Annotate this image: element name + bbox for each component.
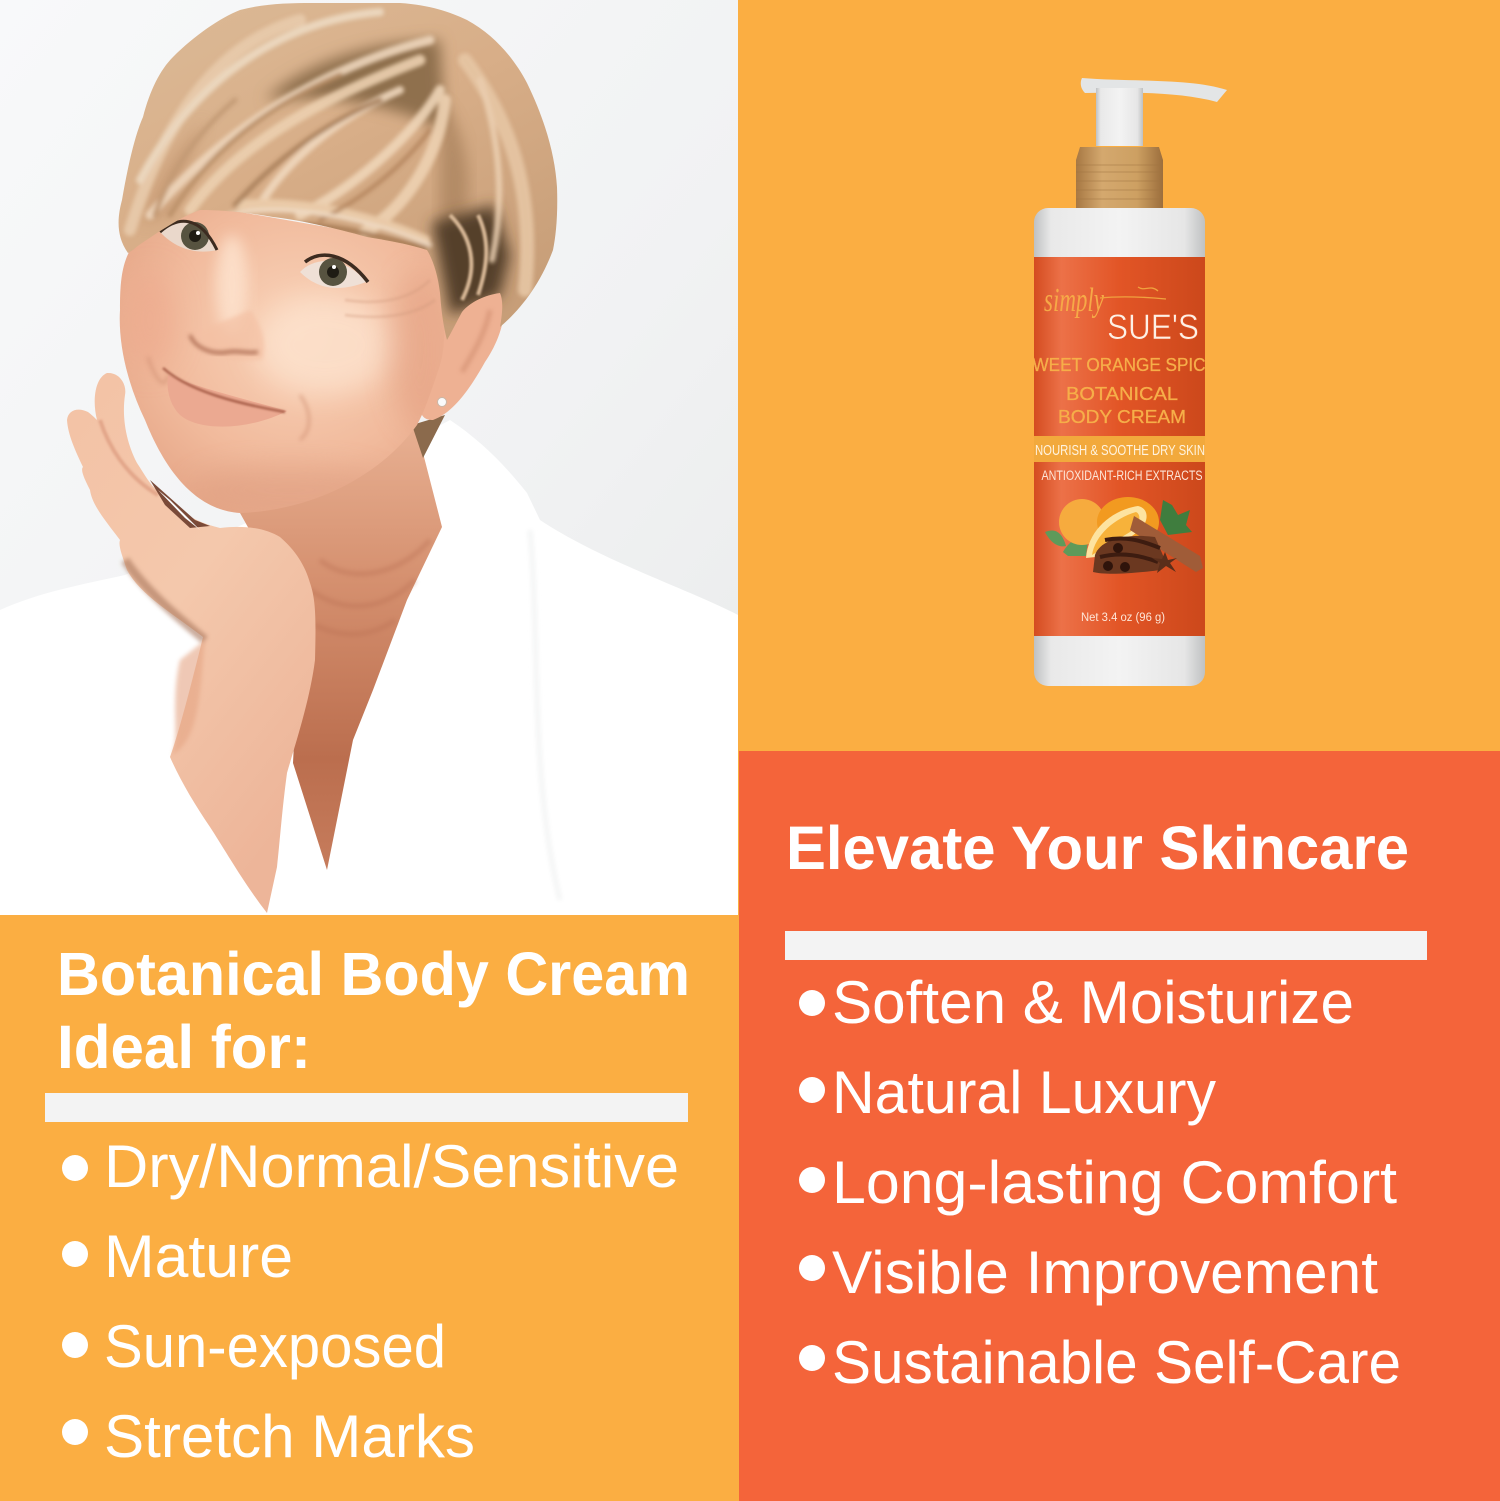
panel: product background bbox=[738, 0, 1500, 751]
product name: SWEET ORANGE SPICE bbox=[1021, 354, 1217, 375]
divider bar bbox=[785, 931, 1427, 960]
icon: oranges and cinnamon bbox=[1045, 497, 1203, 574]
net weight: Net 3.4 oz (96 g) bbox=[1081, 612, 1165, 624]
product name bbox=[1034, 358, 1205, 424]
list: skin types: Mature bbox=[104, 1223, 293, 1290]
panel: woman portrait photo bbox=[0, 0, 738, 915]
list: skin types: Stretch Marks bbox=[104, 1403, 475, 1470]
label subline: ANTIOXIDANT-RICH EXTRACTS bbox=[1042, 468, 1202, 483]
list: benefits: Natural Luxury bbox=[832, 1059, 1216, 1126]
list: benefits: Sustainable Self-Care bbox=[832, 1329, 1401, 1396]
list: skin types: Dry/Normal/Sensitive bbox=[104, 1133, 679, 1200]
heading: ideal for: Botanical Body Cream bbox=[57, 940, 690, 1008]
list: skin types bbox=[62, 1133, 679, 1470]
panel: ideal for bbox=[0, 915, 739, 1501]
eyes bbox=[160, 221, 368, 288]
list: benefits: Long-lasting Comfort bbox=[832, 1149, 1397, 1216]
list: skin types: Sun-exposed bbox=[104, 1313, 446, 1380]
ear bbox=[422, 293, 502, 420]
hair bbox=[100, 0, 570, 345]
list: benefits: Soften & Moisturize bbox=[832, 969, 1354, 1036]
icon: product bottle bbox=[1021, 78, 1227, 686]
neck bbox=[240, 425, 442, 870]
lips bbox=[168, 375, 287, 427]
label band bbox=[1034, 257, 1205, 636]
face bbox=[120, 205, 444, 513]
brand logo bbox=[1044, 282, 1199, 347]
yellow banner bbox=[1034, 436, 1205, 462]
wood collar bbox=[1076, 147, 1163, 208]
bottle body bbox=[1034, 208, 1205, 686]
robe bbox=[0, 420, 738, 915]
back hair below ear bbox=[412, 415, 445, 458]
divider bar bbox=[45, 1093, 688, 1122]
brand logo: simply bbox=[1044, 282, 1105, 319]
hand bbox=[67, 373, 315, 913]
heading: ideal for bbox=[57, 940, 690, 1081]
panel: elevate your skincare bbox=[739, 751, 1500, 1501]
nose bbox=[190, 310, 264, 360]
product name: BODY CREAM bbox=[1058, 406, 1186, 427]
list: benefits: Visible Improvement bbox=[832, 1239, 1378, 1306]
brand logo: SUE'S bbox=[1107, 308, 1199, 347]
pump nozzle bbox=[1081, 78, 1227, 102]
heading: elevate: Elevate Your Skincare bbox=[786, 814, 1409, 882]
heading: ideal for: Ideal for: bbox=[57, 1013, 311, 1081]
list: benefits bbox=[799, 969, 1401, 1396]
product name: BOTANICAL bbox=[1066, 383, 1178, 404]
yellow banner: NOURISH & SOOTHE DRY SKIN bbox=[1035, 442, 1205, 459]
